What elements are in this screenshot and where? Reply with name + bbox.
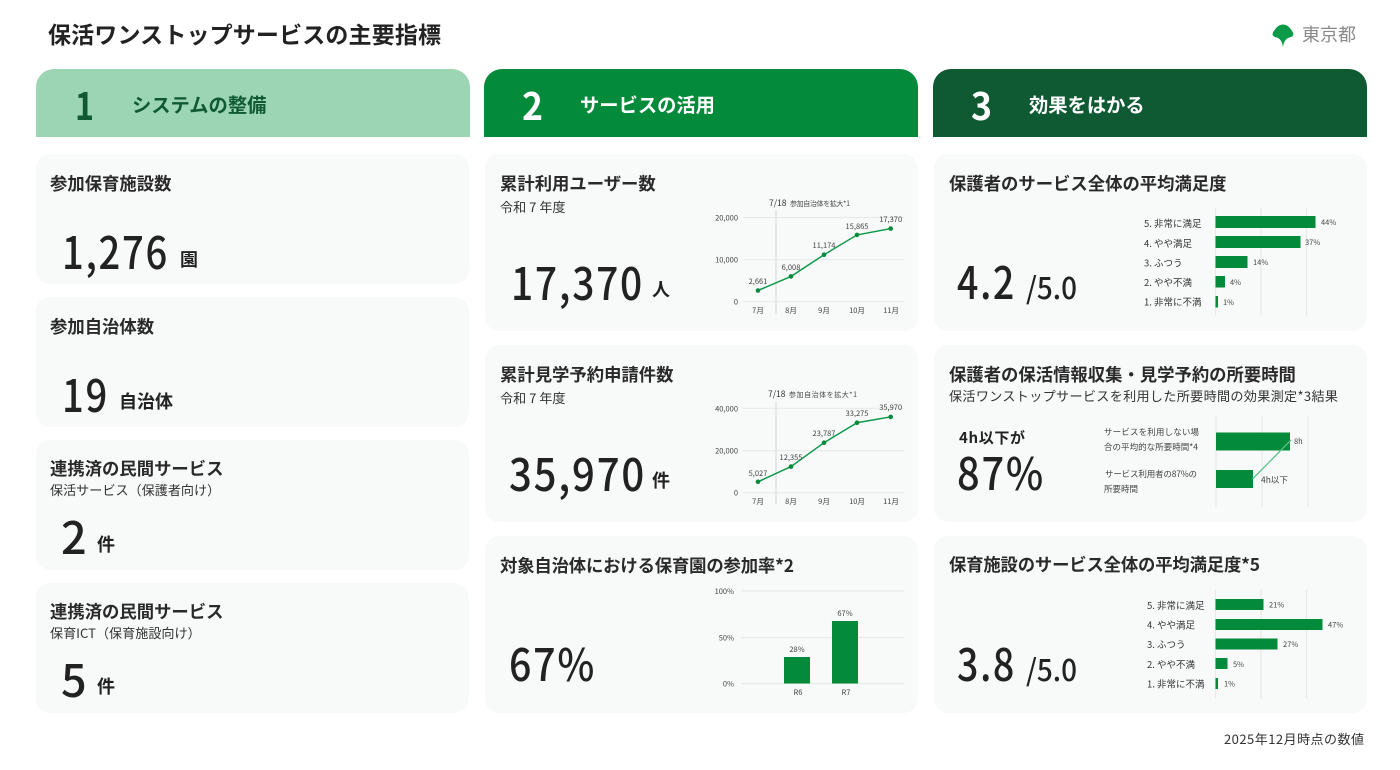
line chart: requests: 23,787 xyxy=(813,428,835,439)
line chart: requests: 35,970 xyxy=(879,402,902,413)
line chart: users xyxy=(715,197,904,316)
panel: private services for parents xyxy=(36,440,469,570)
panel: private services for parents: 連携済の民間サービス xyxy=(50,455,223,480)
panel: participating municipalities xyxy=(36,297,469,427)
line chart: requests: 20,000 xyxy=(715,446,738,457)
panel: time required: 保活ワンストップサービスを利用した所要時間の効果測定*3結果 xyxy=(949,386,1338,405)
line chart: users: 11月 xyxy=(883,305,899,316)
bar chart: time xyxy=(1104,416,1308,507)
line chart: users: 11,174 xyxy=(813,240,835,251)
panel: cumulative users xyxy=(485,154,918,331)
line chart: requests: 参加自治体を拡大*1 xyxy=(789,390,857,400)
panel: cumulative visit requests: 35,970 xyxy=(509,439,646,504)
panel: private services for parents: 件 xyxy=(97,531,115,557)
panel: private services for facilities: 5 xyxy=(61,645,89,710)
panel: participating municipalities: 自治体 xyxy=(119,388,173,414)
line chart: users: 参加自治体を拡大*1 xyxy=(790,199,850,209)
line chart: requests xyxy=(715,388,904,507)
bar chart: parent satisfaction: 44% xyxy=(1321,217,1336,228)
bar chart: parent satisfaction: 3. ふつう xyxy=(1144,256,1183,270)
panel: parent satisfaction: 4.2 xyxy=(957,247,1016,312)
panel: facility satisfaction: 3.8 xyxy=(957,629,1016,694)
panel: participating facilities: 参加保育施設数 xyxy=(50,170,172,195)
panel: participating facilities xyxy=(36,154,469,284)
panel: cumulative visit requests: 件 xyxy=(652,467,670,493)
bar chart: facility satisfaction: 5. 非常に満足 xyxy=(1147,598,1205,612)
bar chart: parent satisfaction: 2. やや不満 xyxy=(1144,275,1193,289)
bar chart: parent satisfaction xyxy=(1144,208,1336,316)
panel: participating municipalities: 参加自治体数 xyxy=(50,313,155,338)
bar chart: participation: R7 xyxy=(842,687,850,698)
panel: header 2 xyxy=(484,69,918,137)
panel: cumulative visit requests xyxy=(485,345,918,522)
line chart: users: 20,000 xyxy=(715,212,738,224)
bar chart: facility satisfaction: 1% xyxy=(1224,678,1235,690)
line chart: requests: 5,027 xyxy=(749,468,767,479)
panel: header 1: システムの整備 xyxy=(132,90,266,118)
bar chart: parent satisfaction: 4. やや満足 xyxy=(1144,236,1193,250)
bar chart: participation xyxy=(715,586,904,698)
title: 保活ワンストップサービスの主要指標 xyxy=(48,16,441,50)
line chart: requests: 12,355 xyxy=(780,452,802,463)
bar chart: time: 合の平均的な所要時間*4 xyxy=(1104,441,1198,453)
line chart: users: 8月 xyxy=(785,305,797,316)
panel: cumulative users: 人 xyxy=(652,276,670,302)
line chart: requests: 9月 xyxy=(818,496,830,507)
panel: participating municipalities: 19 xyxy=(62,360,109,425)
bar chart: facility satisfaction: 47% xyxy=(1328,620,1343,630)
bar chart: time: 4h以下 xyxy=(1261,474,1288,486)
bar chart: facility satisfaction: 4. やや満足 xyxy=(1147,618,1196,632)
line chart: requests: 40,000 xyxy=(715,403,738,414)
panel: header 3: 3 xyxy=(971,76,992,131)
line chart: users: 10月 xyxy=(849,305,865,316)
panel: private services for facilities: 件 xyxy=(97,673,115,699)
panel: participating facilities: 1,276 xyxy=(62,217,169,282)
panel: facility satisfaction: 保育施設のサービス全体の平均満足度*5 xyxy=(949,551,1260,576)
bar chart: parent satisfaction: 4% xyxy=(1230,277,1241,288)
line chart: requests: 0 xyxy=(734,488,738,499)
panel: facility satisfaction xyxy=(934,536,1367,713)
panel: header 3: 効果をはかる xyxy=(1029,90,1145,118)
bar chart: parent satisfaction: 37% xyxy=(1305,237,1320,248)
bar chart: facility satisfaction: 1. 非常に不満 xyxy=(1147,676,1205,690)
panel: header 1 xyxy=(36,69,470,137)
bar chart: time: 所要時間 xyxy=(1104,483,1138,495)
panel: participating facilities: 園 xyxy=(180,246,198,272)
line chart: requests: 33,275 xyxy=(846,408,868,419)
line chart: requests: 8月 xyxy=(785,496,797,507)
panel: header 1: 1 xyxy=(75,76,94,131)
panel: cumulative users: 累計利用ユーザー数 xyxy=(500,170,656,195)
line chart: requests: 7月 xyxy=(752,496,764,507)
line chart: users: 0 xyxy=(734,297,738,308)
panel: header 2: サービスの活用 xyxy=(580,90,715,118)
panel: private services for parents: 保活サービス（保護者向け） xyxy=(50,480,220,499)
line chart: requests: 7/18 xyxy=(768,388,786,400)
bar chart: participation: 28% xyxy=(789,644,805,655)
bar chart: time: サービス利用者の87%の xyxy=(1105,468,1197,480)
bar chart: participation: R6 xyxy=(794,687,802,698)
panel: private services for facilities: 保育ICT（保育施設向け） xyxy=(50,623,201,642)
panel: time required: 4h以下が xyxy=(959,427,1025,448)
line chart: requests: 10月 xyxy=(849,496,865,507)
panel: time required: 87% xyxy=(957,438,1045,503)
panel: private services for parents: 2 xyxy=(61,502,89,567)
bar chart: facility satisfaction: 27% xyxy=(1283,639,1298,650)
bar chart: participation: 100% xyxy=(715,586,734,597)
panel: header 3 xyxy=(933,69,1367,137)
bar chart: participation: 50% xyxy=(719,632,734,644)
line chart: users: 10,000 xyxy=(715,255,738,266)
panel: time required: 保護者の保活情報収集・見学予約の所要時間 xyxy=(949,361,1296,386)
bar chart: participation: 67% xyxy=(837,608,853,619)
bar chart: facility satisfaction: 2. やや不満 xyxy=(1147,657,1196,671)
line chart: users: 7月 xyxy=(752,305,764,316)
panel: parent satisfaction xyxy=(934,154,1367,331)
bar chart: parent satisfaction: 1% xyxy=(1223,297,1234,308)
panel: parent satisfaction: 保護者のサービス全体の平均満足度 xyxy=(949,170,1227,195)
bar chart: time: サービスを利用しない場 xyxy=(1104,426,1199,438)
bar chart: participation: 0% xyxy=(723,678,734,690)
panel: nursery participation rate: 対象自治体における保育園の参加率*2 xyxy=(500,552,794,577)
panel: cumulative visit requests: 累計見学予約申請件数 xyxy=(500,361,674,386)
panel: header 2: 2 xyxy=(522,76,543,131)
bar chart: facility satisfaction: 3. ふつう xyxy=(1147,637,1186,651)
panel: cumulative visit requests: 令和 7 年度 xyxy=(500,388,566,407)
line chart: users: 7/18 xyxy=(769,197,787,209)
panel: cumulative users: 令和 7 年度 xyxy=(500,197,566,216)
panel: parent satisfaction: /5.0 xyxy=(1026,264,1077,308)
line chart: users: 17,370 xyxy=(879,214,902,225)
bar chart: parent satisfaction: 5. 非常に満足 xyxy=(1144,216,1202,230)
bar chart: time: 8h xyxy=(1294,436,1303,447)
panel: facility satisfaction: /5.0 xyxy=(1026,646,1077,690)
panel: time required xyxy=(934,345,1367,522)
logo text: 東京都 xyxy=(1302,21,1356,47)
line chart: requests: 11月 xyxy=(883,496,899,507)
panel: cumulative users: 17,370 xyxy=(511,248,644,313)
bar chart: parent satisfaction: 1. 非常に不満 xyxy=(1144,294,1202,308)
line chart: users: 9月 xyxy=(818,305,830,316)
panel: nursery participation rate xyxy=(485,536,918,713)
bar chart: facility satisfaction xyxy=(1147,590,1343,698)
icon: ginkgo leaf xyxy=(1273,24,1293,47)
panel: private services for facilities xyxy=(36,583,469,713)
bar chart: facility satisfaction: 5% xyxy=(1233,659,1244,670)
line chart: users: 6,008 xyxy=(782,262,800,273)
logo: Tokyo Metropolitan xyxy=(1273,21,1356,47)
footnote: 2025年12月時点の数値 xyxy=(1224,729,1364,748)
bar chart: parent satisfaction: 14% xyxy=(1253,257,1268,268)
bar chart: facility satisfaction: 21% xyxy=(1269,600,1284,610)
line chart: users: 15,865 xyxy=(846,221,868,232)
line chart: users: 2,661 xyxy=(749,276,767,287)
panel: nursery participation rate: 67% xyxy=(509,629,596,694)
panel: private services for facilities: 連携済の民間サービス xyxy=(50,598,223,623)
